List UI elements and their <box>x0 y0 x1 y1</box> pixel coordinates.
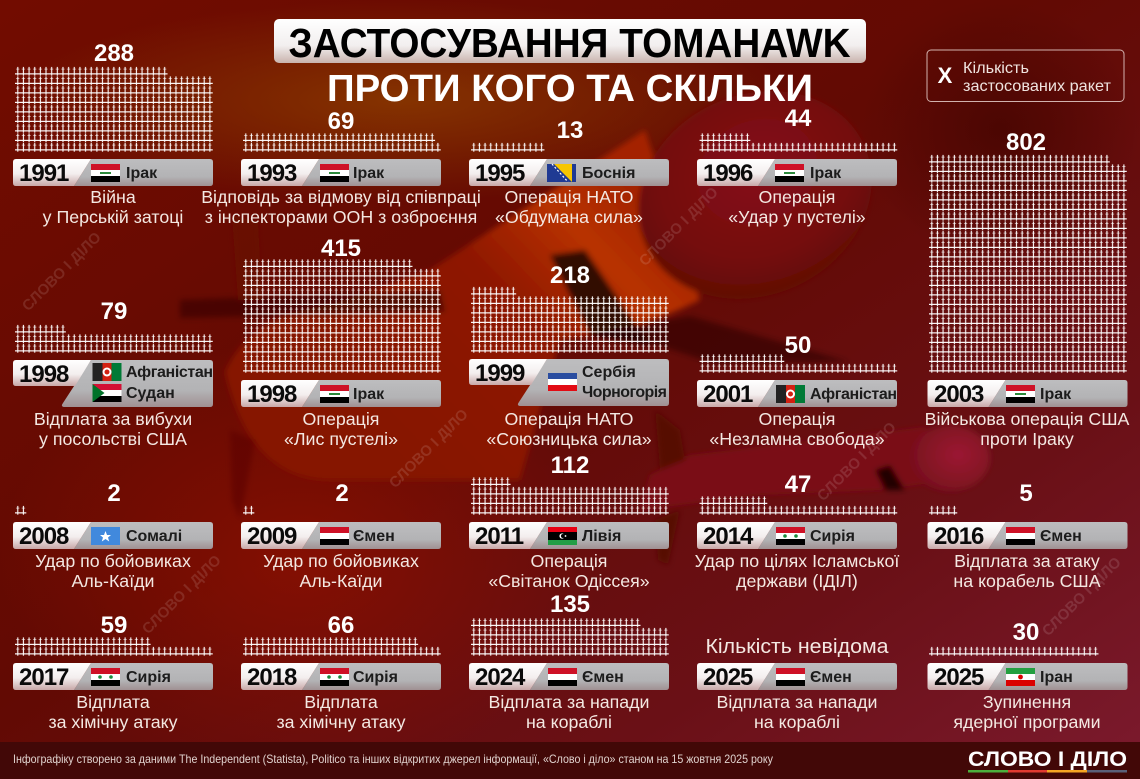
panel: 2024 Yemen: на кораблі <box>526 712 612 732</box>
panel: 2009 Yemen: Удар по бойовиках <box>263 551 419 571</box>
missile count 2 <box>243 506 254 515</box>
panel: 2024 Yemen: 135 <box>550 591 590 618</box>
panel: 2018 Syria: за хімічну атаку <box>276 712 406 732</box>
missile count 802 <box>929 154 1127 373</box>
panel: 1995 Bosnia: 13 <box>557 117 583 144</box>
panel: 2025 Yemen: 2025 <box>703 664 753 691</box>
panel: 1998 Afghanistan and Sudan: 1998 <box>19 361 69 388</box>
missile count 69 <box>243 133 441 152</box>
panel: 1996 Iraq: «Удар у пустелі» <box>728 207 866 227</box>
watermark: СЛОВО І ДІЛО <box>636 184 722 270</box>
panel: 1993 Iraq: з інспекторами ООН з озброєння <box>205 207 477 227</box>
panel: 1995 Bosnia: Операція НАТО <box>504 187 634 207</box>
panel: 2018 Syria <box>241 612 441 732</box>
missile count 79 <box>15 324 213 353</box>
panel: 2024 Yemen: 2024 <box>475 664 526 691</box>
panel: 2011 Libya: 2011 <box>475 523 524 550</box>
watermark: СЛОВО І ДІЛО <box>139 552 225 638</box>
legend: застосованих ракет <box>963 78 1112 95</box>
missile count 5 <box>929 506 957 515</box>
missile count 112 <box>471 477 669 515</box>
panel: 2016 Yemen: Відплата за атаку <box>954 551 1100 571</box>
panel: 2014 Syria: держави (ІДІЛ) <box>736 571 858 591</box>
panel: 1991 Iraq <box>13 40 213 227</box>
panel: 1999 Serbia and Montenegro: Чорногорія <box>582 384 667 401</box>
panel: 2018 Syria: Відплата <box>304 692 378 712</box>
panel: 2018 Syria: 2018 <box>247 664 297 691</box>
watermark: СЛОВО І ДІЛО <box>1039 554 1125 640</box>
panel: 2009 Yemen: 2 <box>335 480 349 507</box>
panel: 2017 Syria <box>13 612 213 732</box>
panel: 2024 Yemen: Ємен <box>582 669 624 686</box>
panel: 2024 Yemen: Відплата за напади <box>489 692 649 712</box>
panel: 2001 Afghanistan <box>697 332 897 449</box>
panel: 2025 Iran <box>928 619 1128 732</box>
missile illustration: large missile <box>180 54 906 520</box>
panel: 1998 Afghanistan and Sudan: у посольстві США <box>39 429 187 449</box>
panel: 2016 Yemen: на корабель США <box>953 571 1101 591</box>
panel: 2001 Afghanistan: Операція <box>759 409 835 429</box>
panel: 2009 Yemen <box>241 480 441 591</box>
panel: 2008 Somalia: 2008 <box>19 523 69 550</box>
panel: 1996 Iraq: Операція <box>759 187 835 207</box>
missile count 2 <box>15 506 26 515</box>
title <box>274 19 866 110</box>
legend: Кількість <box>963 60 1029 77</box>
panel: 2008 Somalia: Удар по бойовиках <box>35 551 191 571</box>
panel: 2008 Somalia: 2 <box>107 480 121 507</box>
panel: 1991 Iraq: у Перській затоці <box>43 207 183 227</box>
missile count 30 <box>929 646 1098 656</box>
panel: 1999 Serbia and Montenegro <box>469 262 669 449</box>
title line 1: ЗАСТОСУВАННЯ TOMAHAWK <box>288 20 851 66</box>
panel: 2011 Libya: Операція <box>531 551 607 571</box>
panel: 2016 Yemen <box>928 480 1128 591</box>
panel: 2011 Libya: 112 <box>551 452 589 479</box>
watermark: СЛОВО І ДІЛО <box>19 229 105 315</box>
panel: 2008 Somalia: Аль-Каїди <box>72 571 154 591</box>
panel: 2011 Libya <box>469 452 669 591</box>
panel: 1996 Iraq: Ірак <box>810 165 842 182</box>
panel: 2025 Iran: ядерної програми <box>953 712 1101 732</box>
missile count 50 <box>700 354 897 373</box>
panel: 1995 Bosnia: 1995 <box>475 160 525 187</box>
panel: 2016 Yemen: 5 <box>1019 480 1033 507</box>
logo: СЛОВО І ДІЛО <box>968 748 1127 771</box>
panel: 2017 Syria: Сирія <box>126 669 171 686</box>
panel: 1991 Iraq: Ірак <box>126 165 158 182</box>
panel: 1999 Serbia and Montenegro: Операція НАТО <box>504 409 634 429</box>
panel: 2017 Syria: за хімічну атаку <box>48 712 178 732</box>
panel: 2014 Syria <box>695 471 899 591</box>
panel: 2001 Afghanistan: Афганістан <box>810 386 897 403</box>
panel: 2003 Iraq: Ірак <box>1040 386 1072 403</box>
panel: 2024 Yemen <box>469 591 669 732</box>
panel: 2017 Syria: Відплата <box>76 692 150 712</box>
missile count 13 <box>471 142 544 152</box>
missile illustration: small missile <box>640 410 990 565</box>
missile count 59 <box>15 637 213 656</box>
panel: 1993 Iraq: 1993 <box>247 160 297 187</box>
source note: Інфографіку створено за даними The Independent (Statista), Politico та інших відкритих джерел інформації, «Слово і діло» станом на 15 жовтня 2025 року <box>13 752 773 766</box>
panel: 2009 Yemen: 2009 <box>247 523 297 550</box>
panel: 2025 Iran: Зупинення <box>983 692 1071 712</box>
panel: 2014 Syria: 47 <box>785 471 811 498</box>
panel: 2003 Iraq: 2003 <box>934 381 984 408</box>
panel: 1993 Iraq: Відповідь за відмову від співпраці <box>201 187 481 207</box>
panel: 2025 Iran: 30 <box>1013 619 1039 646</box>
panel: 2003 Iraq: 802 <box>1006 129 1046 156</box>
panel: 2014 Syria: 2014 <box>703 523 754 550</box>
panel: 2008 Somalia: Сомалі <box>126 528 182 545</box>
missile count 288 <box>15 66 213 152</box>
panel: 1995 Bosnia: Боснія <box>582 165 635 182</box>
panel: 1998 Afghanistan and Sudan: Судан <box>126 385 175 402</box>
legend: X <box>938 63 953 88</box>
missile count 415 <box>243 259 441 373</box>
watermark <box>19 184 1125 640</box>
panel: 2001 Afghanistan: «Незламна свобода» <box>709 429 885 449</box>
panel: 1993 Iraq <box>201 108 481 227</box>
panel: 2011 Libya: Лівія <box>582 528 621 545</box>
panel: 2025 Iran: Іран <box>1040 669 1073 686</box>
panel: 2014 Syria: Сирія <box>810 528 855 545</box>
panel: 2017 Syria: 2017 <box>19 664 69 691</box>
panel: 2003 Iraq: проти Іраку <box>980 429 1074 449</box>
panel: 2018 Syria: Сирія <box>353 669 398 686</box>
panel: 1996 Iraq: 1996 <box>703 160 753 187</box>
watermark: СЛОВО І ДІЛО <box>386 406 472 492</box>
panel: 2025 Yemen: Ємен <box>810 669 852 686</box>
panel: 1991 Iraq: Війна <box>90 187 136 207</box>
panel: 1998 Iraq: «Лис пустелі» <box>284 429 398 449</box>
panel: 1993 Iraq: Ірак <box>353 165 385 182</box>
panel: 1999 Serbia and Montenegro: 218 <box>550 262 590 289</box>
panel: 1996 Iraq <box>697 105 897 227</box>
legend <box>927 50 1124 102</box>
title line 2: ПРОТИ КОГО ТА СКІЛЬКИ <box>327 68 813 110</box>
panel: 1998 Iraq: Операція <box>303 409 379 429</box>
panel: 1999 Serbia and Montenegro: «Союзницька сила» <box>486 429 652 449</box>
footer band <box>0 742 1140 779</box>
panel: 1995 Bosnia <box>469 117 669 227</box>
panel: 2003 Iraq: Військова операція США <box>925 409 1130 429</box>
panel: 2014 Syria: Удар по цілях Ісламської <box>695 551 899 571</box>
panel: 1998 Iraq: 415 <box>321 235 361 262</box>
panel: 2025 Yemen: Відплата за напади <box>717 692 877 712</box>
panel: 1998 Afghanistan and Sudan: 79 <box>101 298 127 325</box>
panel: 1995 Bosnia: «Обдумана сила» <box>495 207 643 227</box>
panel: 1998 Afghanistan and Sudan: Відплата за вибухи <box>34 409 192 429</box>
panel: 2017 Syria: 59 <box>101 612 127 639</box>
panel: 2016 Yemen: 2016 <box>934 523 984 550</box>
panel: 2016 Yemen: Ємен <box>1040 528 1082 545</box>
panel: 1993 Iraq: 69 <box>328 108 354 135</box>
panel: 2009 Yemen: Аль-Каїди <box>300 571 382 591</box>
panel: 2001 Afghanistan: 2001 <box>703 381 753 408</box>
title box <box>274 19 866 63</box>
missile count 218 <box>471 286 669 353</box>
panel: 2025 Yemen: Кількість невідома <box>706 636 889 658</box>
panel: 1999 Serbia and Montenegro: Сербія <box>582 364 636 381</box>
missile count 135 <box>471 618 669 656</box>
panel: 2009 Yemen: Ємен <box>353 528 395 545</box>
panel: 1996 Iraq: 44 <box>785 105 812 132</box>
panel: 2018 Syria: 66 <box>328 612 354 639</box>
panel: 2008 Somalia <box>13 480 213 591</box>
panel: 2001 Afghanistan: 50 <box>785 332 811 359</box>
panel: 2025 Yemen: на кораблі <box>754 712 840 732</box>
missile count 47 <box>700 496 897 515</box>
panel: 2025 Iran: 2025 <box>934 664 984 691</box>
panel: 2011 Libya: «Світанок Одіссея» <box>488 571 650 591</box>
panel: 1991 Iraq: 288 <box>94 40 134 67</box>
panel: 1999 Serbia and Montenegro: 1999 <box>475 360 525 387</box>
panel: 2025 Yemen <box>697 636 897 732</box>
panel: 2003 Iraq <box>925 129 1130 449</box>
panel: 1998 Afghanistan and Sudan <box>13 298 213 449</box>
panel: 1991 Iraq: 1991 <box>19 160 69 187</box>
panel: 1998 Iraq <box>241 235 441 449</box>
panel: 1998 Iraq: Ірак <box>353 386 385 403</box>
panel: 1998 Iraq: 1998 <box>247 381 297 408</box>
missile count 66 <box>243 637 441 656</box>
watermark: СЛОВО І ДІЛО <box>814 419 900 505</box>
panel: 1998 Afghanistan and Sudan: Афганістан <box>126 364 213 381</box>
missile count 44 <box>700 133 897 152</box>
